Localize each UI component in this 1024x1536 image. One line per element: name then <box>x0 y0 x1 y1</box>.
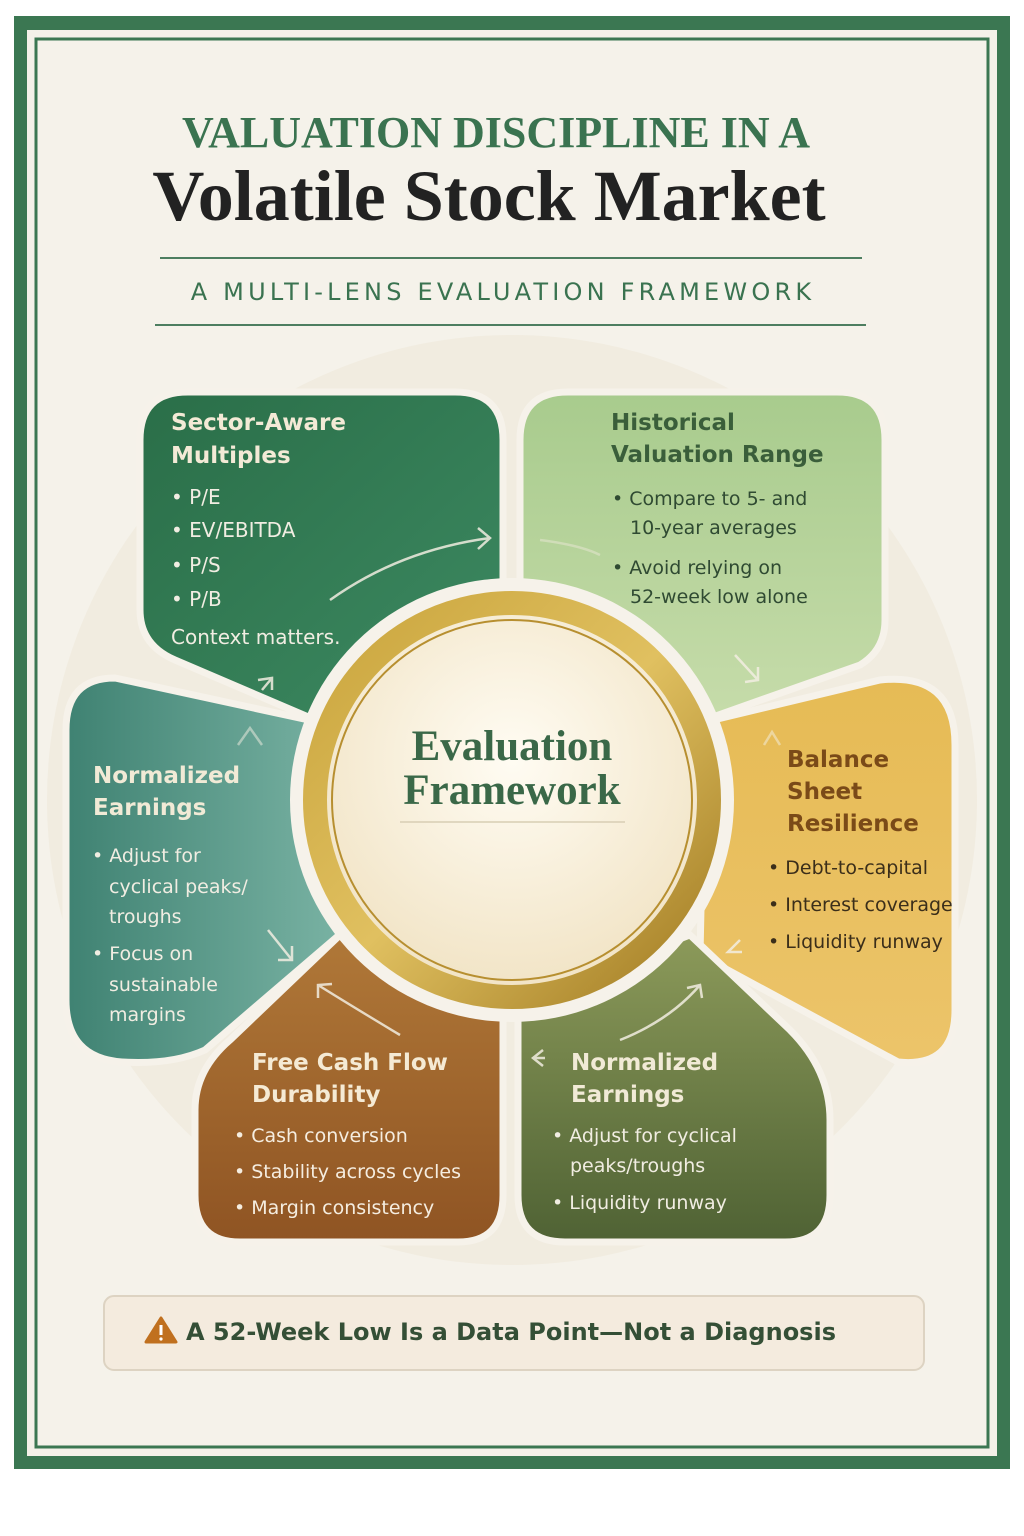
panel: balance sheet resilience: Resilience <box>787 811 919 837</box>
panel: sector-aware multiples <box>140 392 503 722</box>
panel: sector-aware multiples: Multiples <box>171 443 291 469</box>
panel: sector-aware multiples: • P/E <box>171 485 221 509</box>
panel: normalized earnings (left): cyclical peaks/ <box>109 876 248 898</box>
panel: normalized earnings (left): Normalized <box>93 763 240 789</box>
panel: free cash flow durability: • Margin consistency <box>234 1197 434 1219</box>
panel: sector-aware multiples: • EV/EBITDA <box>171 518 296 542</box>
panel: free cash flow durability: Free Cash Flow <box>252 1050 448 1076</box>
panel: normalized earnings (bottom right): • Liquidity runway <box>552 1192 727 1214</box>
arrows <box>238 528 780 1066</box>
panel: balance sheet resilience: • Liquidity runway <box>768 931 943 953</box>
callout: A 52-Week Low Is a Data Point—Not a Diagnosis <box>186 1318 836 1346</box>
panel: balance sheet resilience: Sheet <box>787 779 862 805</box>
panel: free cash flow durability: • Cash conversion <box>234 1125 408 1147</box>
panel: normalized earnings (left): Earnings <box>93 795 206 821</box>
panel: historical valuation range: 10-year averages <box>630 517 797 539</box>
panel: balance sheet resilience: • Debt-to-capital <box>768 857 928 879</box>
panel: free cash flow durability: Durability <box>252 1082 380 1108</box>
panel: free cash flow durability <box>195 935 503 1242</box>
panel: normalized earnings (left) <box>66 678 345 1062</box>
panel: normalized earnings (left): margins <box>109 1004 186 1026</box>
panel: normalized earnings (bottom right): Normalized <box>571 1050 718 1076</box>
panel: normalized earnings (bottom right): peaks/troughs <box>570 1155 705 1177</box>
callout <box>104 1296 924 1370</box>
panel: normalized earnings (left): sustainable <box>109 974 218 996</box>
center circle: evaluation framework <box>290 578 734 1022</box>
center circle: evaluation framework: Framework <box>403 767 621 814</box>
panel: historical valuation range: • Compare to 5- and <box>612 488 807 510</box>
panel: sector-aware multiples: Sector-Aware <box>171 410 346 436</box>
background halo <box>47 335 977 1265</box>
title <box>152 108 826 236</box>
panel: sector-aware multiples: • P/B <box>171 587 222 611</box>
panel: historical valuation range: Valuation Range <box>611 442 824 468</box>
panel: balance sheet resilience <box>700 679 955 1063</box>
title: Volatile Stock Market <box>152 156 826 236</box>
panel: historical valuation range: 52-week low alone <box>630 586 808 608</box>
panel: sector-aware multiples: • P/S <box>171 553 221 577</box>
panel: historical valuation range: • Avoid relying on <box>612 557 782 579</box>
panel: normalized earnings (bottom right): • Adjust for cyclical <box>552 1125 737 1147</box>
panel: historical valuation range <box>520 392 885 718</box>
panel: historical valuation range: Historical <box>611 410 735 436</box>
center circle: evaluation framework: Evaluation <box>412 723 612 770</box>
panel: sector-aware multiples: Context matters. <box>171 625 340 649</box>
panel: normalized earnings (left): troughs <box>109 906 182 928</box>
panel: free cash flow durability: • Stability across cycles <box>234 1161 461 1183</box>
panel: balance sheet resilience: • Interest coverage <box>768 894 953 916</box>
panel: normalized earnings (bottom right) <box>518 935 830 1242</box>
panel: normalized earnings (left): • Focus on <box>92 943 193 965</box>
title: VALUATION DISCIPLINE IN A <box>182 108 810 157</box>
icon: warning <box>146 1318 176 1342</box>
subtitle: A MULTI-LENS EVALUATION FRAMEWORK <box>191 278 815 306</box>
panel: normalized earnings (left): • Adjust for <box>92 845 201 867</box>
panel: balance sheet resilience: Balance <box>787 747 889 773</box>
panel: normalized earnings (bottom right): Earnings <box>571 1082 684 1108</box>
